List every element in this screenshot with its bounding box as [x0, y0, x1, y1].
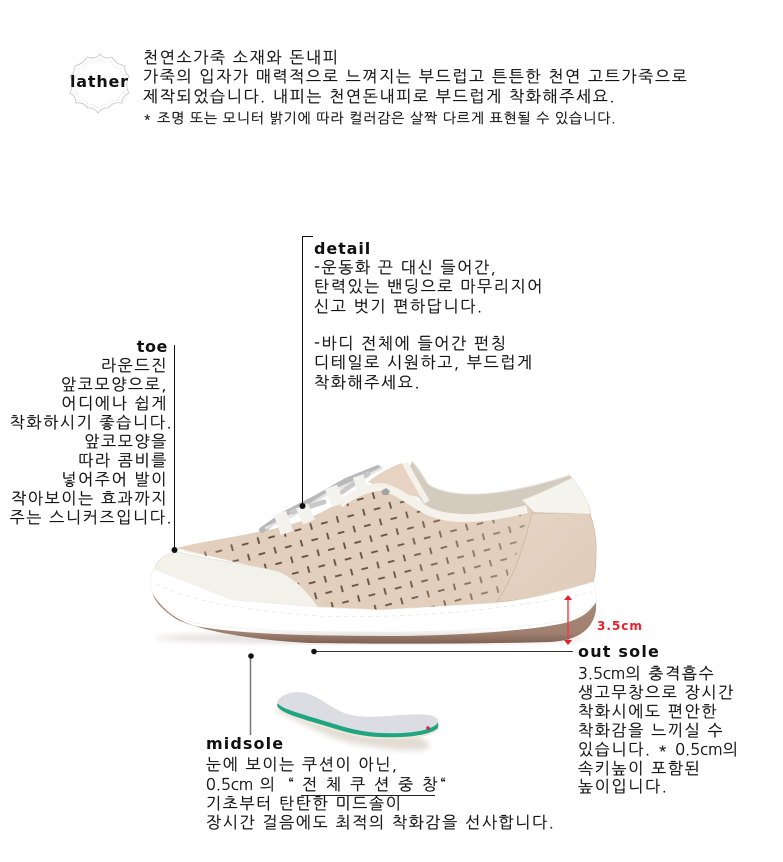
- text block: toe: [10, 337, 173, 526]
- collar trim: [340, 487, 527, 518]
- heel counter: [497, 513, 596, 602]
- text block: midsole: 기초부터 탄탄한 미드솔이: [206, 796, 403, 812]
- text block: midsole: 0.5cm 의: [206, 777, 276, 793]
- text block: toe: 작아보이는 효과까지: [11, 491, 168, 507]
- text block: toe: 어디에나 쉽게: [61, 396, 168, 412]
- heading: out sole: out sole: [578, 642, 660, 661]
- text block: detail: -운동화 끈 대신 들어간,: [314, 260, 497, 276]
- ground shadow: [155, 632, 585, 644]
- intro text block: 제작되었습니다. 내피는 천연돈내피로 부드럽게 착화해주세요.: [143, 89, 616, 105]
- callout line: detail: [300, 236, 313, 509]
- text block: toe: 따라 콤비를: [78, 453, 168, 469]
- text block: out sole: 있습니다. * 0.5cm의: [578, 742, 740, 758]
- text block: out sole: 높이입니다.: [578, 779, 668, 795]
- callout line: midsole: [248, 653, 254, 735]
- label: 3.5cm: 3.5cm: [597, 619, 643, 633]
- insole lining: [405, 461, 578, 520]
- text block: toe: 앞코모양으로,: [61, 377, 168, 393]
- callout line: out sole: [311, 649, 573, 654]
- midsole: [150, 569, 596, 632]
- text block: midsole: “: [288, 777, 295, 793]
- heading: midsole: midsole: [206, 734, 284, 753]
- callout line: toe: [172, 345, 178, 553]
- heading: toe: toe: [137, 337, 168, 356]
- icon: insole: [273, 692, 438, 751]
- lace bands: [280, 476, 364, 533]
- text block: detail: 착화해주세요.: [314, 375, 421, 391]
- text block: out sole: 착화감을 느끼실 수: [578, 723, 724, 739]
- text block: detail: [314, 239, 544, 391]
- text block: detail: 탄력있는 밴딩으로 마무리지어: [314, 279, 544, 295]
- perforation fade: [182, 489, 527, 611]
- text block: midsole: “: [440, 777, 447, 793]
- intro text block: 천연소가죽 소재와 돈내피: [143, 50, 340, 66]
- text block: detail: 디테일로 시원하고, 부드럽게: [314, 355, 534, 371]
- text block: out sole: 착화시에도 편안한: [578, 704, 718, 720]
- icon: leather hide: [70, 54, 129, 113]
- laces: [262, 468, 382, 530]
- intro text block: 가죽의 입자가 매력적으로 느껴지는 부드럽고 튼튼한 천연 고트가죽으로: [143, 69, 688, 85]
- intro text block: [143, 50, 688, 126]
- outsole tread: [152, 592, 596, 644]
- text block: toe: 착화하시기 좋습니다.: [10, 415, 173, 431]
- text block: out sole: [578, 642, 740, 795]
- text block: midsole: 장시간 걸음에도 최적의 착화감을 선사합니다.: [206, 815, 555, 831]
- text block: midsole: [206, 734, 555, 831]
- tongue: [368, 463, 422, 498]
- text block: toe: 넣어주어 발이: [61, 472, 168, 488]
- shoe: [150, 461, 596, 644]
- perforated upper: [176, 483, 536, 612]
- text block: detail: -바디 전체에 들어간 펀칭: [314, 336, 507, 352]
- throat trim: [405, 463, 427, 502]
- text block: out sole: 생고무창으로 장시간: [578, 685, 735, 701]
- arrow: sole height: [564, 595, 572, 645]
- perforation pattern: [182, 489, 527, 611]
- eyelet: [381, 488, 390, 495]
- heading: detail: detail: [314, 239, 371, 258]
- toe cap: [152, 552, 318, 607]
- underline: full cushion: [301, 794, 435, 796]
- heel tab: [522, 478, 591, 514]
- text block: toe: 라운드진: [101, 358, 168, 374]
- icon label: lather: lather: [70, 72, 129, 91]
- text block: detail: 신고 벗기 편하답니다.: [314, 299, 484, 315]
- text block: toe: 앞코모양을: [84, 434, 168, 450]
- text block: out sole: 속키높이 포함된: [578, 761, 701, 777]
- text block: midsole: 전체쿠션중창: [302, 777, 446, 793]
- text block: out sole: 3.5cm의 충격흡수: [578, 666, 715, 682]
- text block: midsole: 눈에 보이는 쿠션이 아닌,: [206, 757, 398, 773]
- intro text block: * 조명 또는 모니터 밝기에 따라 컬러감은 살짝 다르게 표현될 수 있습니다.: [143, 112, 616, 126]
- text block: toe: 주는 스니커즈입니다.: [10, 510, 173, 526]
